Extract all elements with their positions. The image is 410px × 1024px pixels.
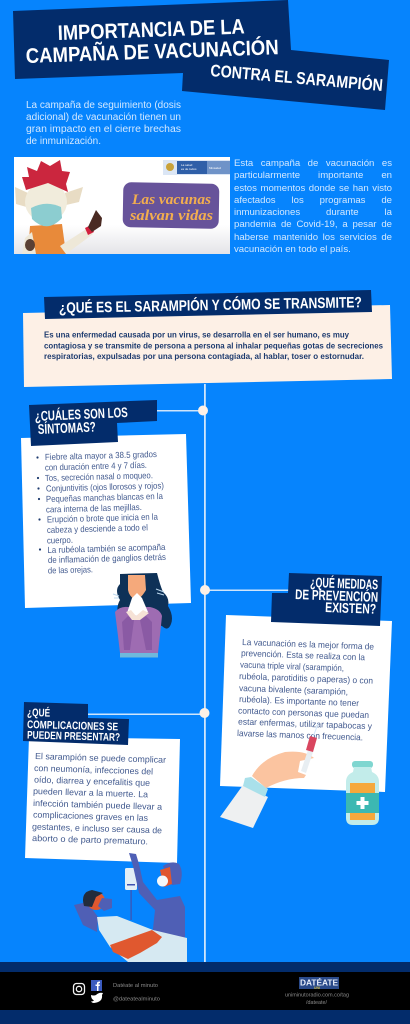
icon: twitter bbox=[91, 993, 103, 1003]
text: campaign paragraph: estos momentos donde se han visto bbox=[234, 183, 392, 194]
text: definition: respiratorias, expulsadas por una persona contagiada, al hablar, toser o estornudar. bbox=[44, 352, 364, 361]
text: definition: Es una enfermedad causada por un virus, se desarrolla en el ser humano, es muy bbox=[44, 330, 350, 340]
text: definition bbox=[44, 330, 384, 361]
text: prevention: rubéola, parotiditis o paperas) o con bbox=[239, 671, 373, 686]
text: complications: oído, diarrea y encefalitis que bbox=[34, 775, 150, 788]
timeline connector bbox=[88, 384, 290, 962]
intro text: adicional) de vacunación tienen un bbox=[26, 112, 181, 123]
campaign image: Minsalud bbox=[209, 166, 221, 170]
panel: what is measles bbox=[23, 290, 392, 387]
text: campaign paragraph: Esta campaña de vacunación es bbox=[234, 158, 392, 169]
logo: dateate: DATÉATE bbox=[300, 978, 339, 988]
text: campaign paragraph bbox=[234, 158, 392, 255]
campaign image: es de todos bbox=[181, 167, 197, 171]
symptoms list: Fiebre alta mayor a 38.5 grados bbox=[45, 449, 158, 462]
text: campaign paragraph: pandemia de Covid-19, a pesar de bbox=[234, 219, 392, 230]
text: complications: pueden llevar a la muerte. La bbox=[33, 786, 148, 799]
heading: prevention: EXISTEN? bbox=[325, 599, 376, 617]
text: prevention: rubéola). Es importante no tener bbox=[239, 694, 359, 708]
symptoms list: de las orejas. bbox=[48, 564, 93, 575]
text: definition: contagiosa y se transmite de persona a persona al inhalar pequeñas gotas de secreciones bbox=[44, 342, 384, 350]
title banner: IMPORTANCIA DE LA bbox=[57, 15, 245, 45]
text: campaign paragraph: vacunación en todo el país. bbox=[234, 244, 351, 255]
icon: instagram bbox=[74, 984, 84, 994]
text: website: uniminutoradio.com.co/tag bbox=[285, 992, 349, 998]
text: complications: gestantes, e incluso ser causa de bbox=[32, 822, 162, 835]
intro text: de inmunización. bbox=[26, 136, 101, 147]
text: campaign paragraph: particularmente importante en bbox=[234, 170, 392, 181]
heading: complications: COMPLICACIONES SE bbox=[27, 719, 118, 733]
symptoms list: cara interna de las mejillas. bbox=[46, 502, 142, 514]
text: prevention: lavarse las manos con frecuencia. bbox=[237, 728, 363, 742]
icon: hand with syringe bbox=[220, 724, 318, 828]
text: complications: infección también puede llevar a bbox=[33, 798, 162, 812]
symptoms list: cuerpo. bbox=[47, 535, 73, 545]
footer bbox=[0, 962, 410, 1024]
text: campaign paragraph: haberse mantenido los servicios de bbox=[234, 232, 392, 243]
text: prevention: vacuna bivalente (sarampión, bbox=[239, 683, 348, 697]
campaign image bbox=[14, 157, 230, 254]
text: social names: Datéate al minuto bbox=[113, 983, 158, 989]
heading: complications: ¿QUÉ bbox=[27, 706, 50, 720]
text: complications: complicaciones graves en las bbox=[33, 810, 149, 823]
text: complications: con neumonía, infecciones del bbox=[34, 763, 153, 777]
symptoms list bbox=[36, 449, 167, 575]
text: prevention: La vacunación es la mejor forma de bbox=[242, 637, 374, 652]
symptoms list: Conjuntivitis (ojos llorosos y rojos) bbox=[46, 480, 164, 493]
symptoms list: de inflamación de ganglios detrás bbox=[48, 552, 167, 565]
text: prevention: prevención. Esta se realiza con la bbox=[241, 648, 365, 662]
text: prevention: vacuna triple viral (sarampión, bbox=[240, 660, 344, 673]
heading: complications bbox=[23, 702, 129, 745]
symptoms list: Tos, secreción nasal o moqueo. bbox=[45, 470, 153, 483]
intro text: gran impacto en el cierre brechas bbox=[26, 124, 181, 135]
symptoms list: con duración entre 4 y 7 días. bbox=[45, 460, 147, 472]
icon: facebook bbox=[91, 980, 102, 991]
title banner: CAMPAÑA DE VACUNACIÓN bbox=[25, 35, 279, 68]
heading: symptoms: SÍNTOMAS? bbox=[37, 418, 96, 437]
text: campaign paragraph: afectados los programas de bbox=[234, 195, 392, 206]
symptoms list: cabeza y desciende a todo el bbox=[47, 522, 148, 535]
heading: symptoms bbox=[29, 400, 157, 446]
icon: woman sneezing bbox=[113, 573, 172, 658]
campaign image: La salud bbox=[181, 163, 193, 167]
logo: dateate bbox=[299, 977, 339, 990]
text: social names bbox=[113, 983, 160, 1002]
heading: prevention: DE PREVENCIÓN bbox=[295, 585, 378, 605]
heading: complications: PUEDEN PRESENTAR? bbox=[27, 730, 120, 744]
text: website: /dateate/ bbox=[306, 1000, 328, 1006]
text: prevention bbox=[237, 637, 374, 742]
heading: prevention bbox=[271, 573, 382, 626]
symptoms list: Erupción o brote que inicia en la bbox=[47, 512, 158, 524]
text: prevention: estar enfermas, utilizar tapabocas y bbox=[238, 717, 373, 731]
campaign image: salvan vidas bbox=[129, 208, 213, 224]
text: social names: @dateatealminuto bbox=[113, 996, 160, 1002]
title banner bbox=[13, 0, 389, 110]
logo: dateate: UNI bbox=[314, 986, 320, 990]
text: campaign paragraph: inmunizaciones durante la bbox=[234, 207, 392, 218]
intro text bbox=[26, 100, 181, 147]
icon: vaccine bottle bbox=[346, 761, 379, 825]
panel: prevention bbox=[220, 573, 392, 792]
symptoms list: Pequeñas manchas blancas en la bbox=[46, 491, 163, 504]
text: complications: El sarampión se puede complicar bbox=[35, 751, 166, 765]
panel: complications bbox=[23, 702, 180, 863]
symptoms list: La rubéola también se acompaña bbox=[47, 542, 166, 555]
text: complications bbox=[32, 751, 166, 846]
text: prevention: contacto con personas que puedan bbox=[238, 706, 369, 720]
heading: symptoms: ¿CUÁLES SON LOS bbox=[34, 404, 128, 424]
icon: nurse and patient bbox=[74, 853, 187, 962]
text: website bbox=[285, 992, 349, 1006]
intro text: La campaña de seguimiento (dosis bbox=[26, 100, 181, 111]
text: complications: aborto o de parto prematuro. bbox=[32, 833, 148, 846]
panel: symptoms bbox=[21, 400, 191, 608]
campaign image: Las vacunas bbox=[131, 192, 211, 208]
